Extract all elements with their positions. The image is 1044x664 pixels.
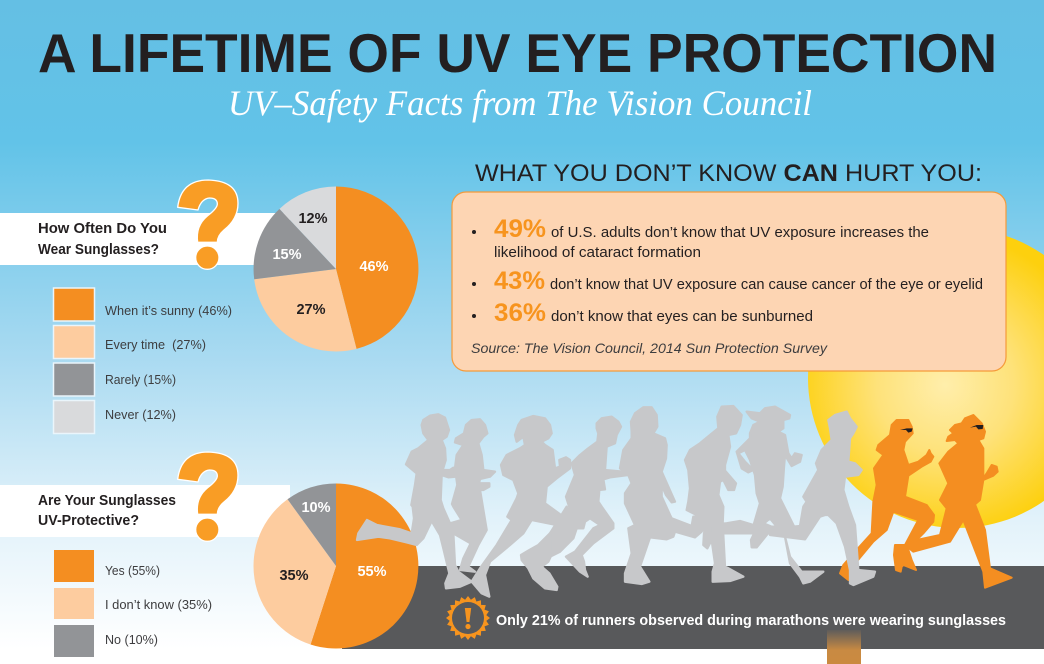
fact: 49%: of U.S. adults don’t know that UV exposure increases the xyxy=(551,225,929,241)
fact: 49%: 49% xyxy=(494,215,546,243)
legend: how often xyxy=(54,288,232,434)
heading: what you don't know: WHAT YOU DON’T KNOW CAN HURT YOU: xyxy=(475,160,982,187)
heading: UV-protective xyxy=(38,492,176,529)
source note: Source: The Vision Council, 2014 Sun Protection Survey xyxy=(471,340,828,356)
pie chart: how often xyxy=(254,186,418,351)
pie chart: how often: 46% xyxy=(359,259,389,275)
pie chart: how often: 12% xyxy=(298,211,328,227)
pie chart: UV-protective: 55% xyxy=(357,564,387,580)
pie chart: UV-protective xyxy=(253,484,418,648)
band: UV-protective xyxy=(0,485,290,537)
panel: UV facts xyxy=(452,192,1006,371)
fact: 36%: 36% xyxy=(494,299,546,327)
sun xyxy=(808,228,1044,528)
road xyxy=(342,566,1044,649)
subtitle: UV–Safety Facts from The Vision Council xyxy=(228,83,812,123)
heading: UV-protective: Are Your Sunglasses xyxy=(38,492,176,509)
heading: how often: Wear Sunglasses? xyxy=(38,241,159,258)
heading: UV-protective: UV-Protective? xyxy=(38,512,139,529)
pie chart: UV-protective: 35% xyxy=(279,568,309,584)
legend: how often: Rarely (15%) xyxy=(105,372,176,387)
band: how often xyxy=(0,213,290,265)
heading: how often: How Often Do You xyxy=(38,220,167,237)
legend: UV-protective: No (10%) xyxy=(105,632,158,647)
orange runners wearing sunglasses xyxy=(840,415,1012,588)
fact: 49% xyxy=(472,215,929,261)
heading: how often xyxy=(38,220,167,258)
legend: how often: Every time (27%) xyxy=(105,337,206,352)
gray runners, left group xyxy=(357,414,570,597)
icon: warning sunburst xyxy=(446,596,490,640)
gray runners, middle group xyxy=(550,407,713,584)
fact: 43%: don’t know that UV exposure can cause cancer of the eye or eyelid xyxy=(550,277,983,293)
question mark: how often xyxy=(178,180,238,269)
legend: UV-protective xyxy=(54,550,212,657)
legend: UV-protective: I don’t know (35%) xyxy=(105,597,212,612)
legend: UV-protective: Yes (55%) xyxy=(105,563,160,578)
pie chart: how often: 27% xyxy=(296,302,326,318)
gray runners, right group xyxy=(685,406,823,583)
legend: how often: When it’s sunny (46%) xyxy=(105,303,232,318)
pie chart: how often: 15% xyxy=(272,247,302,263)
callout: marathon runners: Only 21% of runners observed during marathons were wearing sunglasses xyxy=(496,613,1006,629)
road stub xyxy=(827,630,861,664)
gray runner in front of the sun xyxy=(767,412,875,585)
fact: 43%: 43% xyxy=(494,267,545,295)
fact: 49%: likelihood of cataract formation xyxy=(494,245,701,261)
fact: 43% xyxy=(472,267,983,295)
title: A LIFETIME OF UV EYE PROTECTION xyxy=(38,23,997,84)
legend: how often: Never (12%) xyxy=(105,407,176,422)
pie chart: UV-protective: 10% xyxy=(301,500,331,516)
fact: 36% xyxy=(472,299,813,327)
fact: 36%: don’t know that eyes can be sunburned xyxy=(551,309,813,325)
question mark: UV-protective xyxy=(178,452,238,541)
